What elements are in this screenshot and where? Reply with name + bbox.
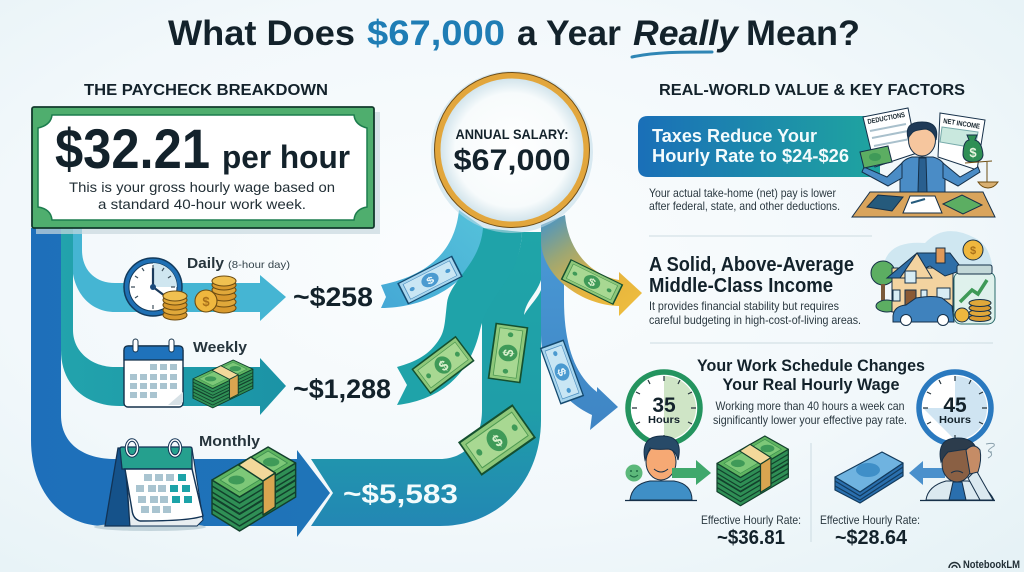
banner — [638, 116, 880, 177]
white slit — [524, 280, 541, 315]
heading: work schedule: Working more than 40 hours a week can — [716, 399, 904, 413]
panel: middle-class income: Middle-Class Income — [649, 275, 833, 297]
title: $67,000 — [367, 14, 505, 53]
panel: middle-class income: careful budgeting in high-cost-of-living areas. — [649, 313, 861, 327]
text: 28.64 rate: Effective Hourly Rate: — [820, 513, 920, 527]
icon: coin stacks: $ — [202, 294, 210, 309]
label: weekly: Weekly — [193, 340, 247, 356]
illustration: man with taxes: $ — [969, 145, 977, 160]
panel: middle-class income: It provides financial stability but requires — [649, 299, 839, 313]
panel: middle-class income — [649, 254, 861, 327]
flow: daily — [72, 228, 286, 321]
arrow: blue — [909, 461, 945, 485]
bill: green gold arrow — [562, 260, 622, 304]
divider — [810, 443, 812, 542]
label: daily: (8-hour day) — [228, 259, 290, 271]
illustration: house, car and jar — [871, 231, 995, 326]
icon: 45 hours clock — [919, 372, 991, 444]
banknote card: a standard 40-hour work week. — [98, 196, 306, 212]
ribbon: weekly return — [397, 228, 522, 405]
value: daily: ~$258 — [293, 282, 373, 312]
icon: monthly money — [212, 447, 296, 531]
bill: light blue — [398, 256, 462, 304]
bill: green weekly: $ — [436, 357, 452, 375]
icon: monthly calendar — [94, 440, 206, 531]
panel: taxes: Taxes Reduce Your — [652, 125, 817, 146]
text: 36.81 rate: ~$36.81 — [717, 527, 785, 549]
panel: taxes: Your actual take-home (net) pay is lower — [649, 186, 836, 200]
icon: happy person — [625, 436, 697, 500]
text: 36.81 rate: Effective Hourly Rate: — [701, 513, 801, 527]
ribbon: blue to schedule — [541, 225, 618, 430]
icon: 35 hours clock: Hours — [648, 414, 680, 426]
icon: 35 hours clock: 35 — [652, 394, 676, 417]
illustration: man with taxes: NET INCOME — [943, 118, 981, 131]
icon: smiley — [626, 464, 642, 482]
title: Really — [633, 14, 740, 53]
bill: green lower: $ — [489, 431, 507, 451]
panel: taxes — [638, 116, 880, 213]
icon: wall clock — [124, 258, 182, 316]
icon: 35 hours clock — [628, 372, 700, 444]
flow: weekly — [61, 228, 286, 415]
bill: green center: $ — [499, 348, 517, 358]
divider — [650, 342, 993, 344]
value: weekly: ~$1,288 — [293, 374, 391, 404]
bill: green lower — [459, 405, 535, 475]
heading: work schedule: Your Work Schedule Changes — [697, 356, 925, 375]
banknote card: $32.21 — [55, 117, 210, 180]
panel: middle-class income: A Solid, Above-Average — [649, 254, 854, 276]
icon: 45 hours clock: Hours — [939, 414, 971, 426]
annual salary circle — [431, 71, 593, 233]
banknote card: This is your gross hourly wage based on — [69, 179, 335, 195]
illustration: house, car and jar: $ — [970, 245, 976, 257]
illustration: man with taxes — [852, 108, 998, 217]
bill: light blue: $ — [425, 275, 437, 287]
bill: blue arrow — [541, 340, 583, 404]
value: monthly: ~$5,583 — [343, 479, 458, 509]
label: monthly: Monthly — [199, 434, 260, 450]
icon: green money stack — [717, 436, 788, 506]
annual salary circle: ANNUAL SALARY: — [456, 126, 568, 142]
heading: work schedule: Your Real Hourly Wage — [722, 375, 900, 394]
bill: blue arrow: $ — [554, 366, 569, 378]
heading: work schedule: significantly lower your effective pay rate. — [713, 413, 907, 427]
text: 36.81 rate — [701, 513, 801, 549]
bill: green weekly — [412, 337, 474, 393]
label: daily — [187, 256, 290, 272]
banknote card: per hour — [222, 139, 350, 175]
panel: taxes: Hourly Rate to $24-$26 — [652, 145, 849, 166]
text: 28.64 rate: ~$28.64 — [835, 527, 908, 549]
heading: work schedule — [697, 356, 925, 427]
title: Mean? — [746, 14, 860, 53]
icon: 45 hours clock: 45 — [943, 394, 967, 417]
heading: paycheck breakdown: THE PAYCHECK BREAKDOWN — [84, 82, 328, 99]
banknote card — [32, 107, 380, 234]
panel: taxes: after federal, state, and other deductions. — [649, 199, 840, 213]
flow: monthly — [31, 228, 330, 537]
divider — [649, 235, 872, 237]
icon: weekly calendar — [124, 339, 183, 407]
annual salary circle: $67,000 — [454, 144, 570, 177]
illustration: man with taxes: DEDUCTIONS — [867, 112, 906, 126]
arrow: green — [672, 460, 711, 485]
ribbon: gold arrow — [541, 215, 642, 316]
bill: green gold arrow: $ — [586, 275, 598, 289]
title — [168, 14, 860, 57]
text: 28.64 rate — [820, 513, 920, 549]
icon: coin stacks — [163, 276, 236, 320]
icon: stressed person — [920, 438, 995, 500]
bill: green center — [489, 323, 527, 383]
icon: blue money stack — [835, 452, 903, 503]
heading: real-world value: REAL-WORLD VALUE & KEY FACTORS — [659, 82, 965, 99]
title: a Year — [517, 14, 621, 53]
title: What Does — [168, 14, 355, 53]
ribbon: daily return — [381, 210, 487, 308]
ribbon: monthly return — [311, 232, 541, 526]
icon: weekly money — [193, 360, 253, 408]
label: daily: Daily — [187, 256, 224, 272]
